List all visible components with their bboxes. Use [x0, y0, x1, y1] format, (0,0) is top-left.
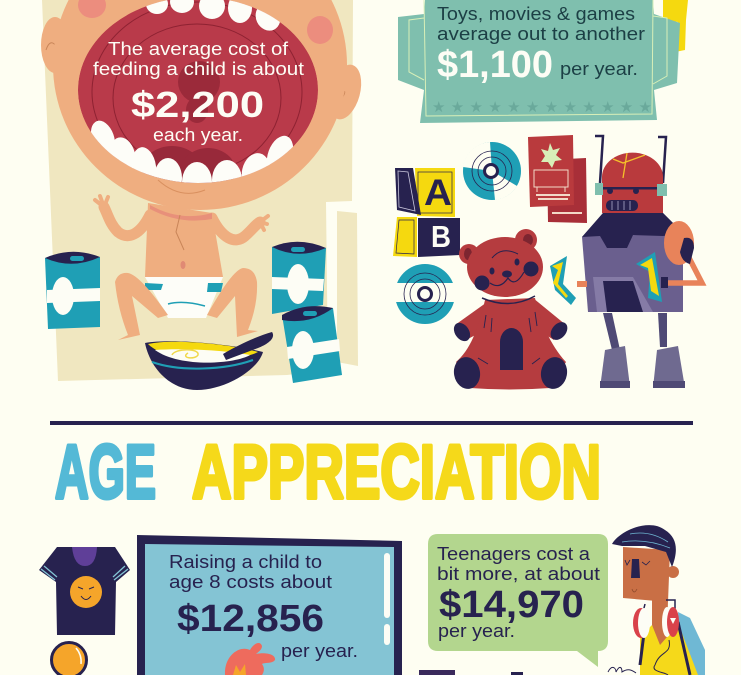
text: feeding cost: $2,200: [131, 84, 264, 125]
icon: CD lower: [395, 264, 455, 324]
icon: t-shirt: [39, 547, 130, 635]
icon: CD upper: [463, 142, 521, 200]
illustration: baby head: [41, 0, 367, 210]
icon: left can: [45, 252, 100, 329]
text: toys cost: $1,100: [437, 44, 553, 86]
icon: cereal bowl: [145, 332, 273, 390]
illustration: robot: [550, 136, 702, 388]
icon: books: [528, 135, 587, 223]
text: age 8 cost: age 8 costs about: [169, 571, 332, 592]
icon: yellow ticket behind: [663, 0, 688, 52]
panel: age 8 screen: [137, 535, 402, 675]
illustration: open mouth: [78, 0, 318, 202]
text: feeding cost: feeding a child is about: [93, 58, 304, 79]
screen surface: [145, 544, 394, 675]
icon: alphabet blocks: B: [431, 219, 451, 254]
text: teen cost: per year.: [438, 620, 515, 641]
heading: age appreciation: [55, 430, 601, 515]
text: toys cost: Toys, movies & games: [437, 3, 635, 24]
text: teen cost: [437, 543, 600, 641]
text: age 8 cost: $12,856: [177, 598, 324, 640]
text: age 8 cost: [169, 551, 358, 661]
beige backdrop: [42, 0, 358, 381]
icon: upper right can: [272, 242, 326, 314]
panel: feeding a child: [41, 0, 367, 390]
scroll bar: [384, 553, 390, 645]
panel: toys ticket: [398, 0, 688, 123]
ticket inner border: [409, 0, 667, 116]
text: feeding cost: each year.: [153, 124, 243, 145]
text: toys cost: [437, 3, 645, 86]
icons: items at bottom edge: [419, 670, 523, 675]
text: feeding cost: [93, 38, 304, 145]
icon: alphabet blocks: [393, 168, 460, 257]
ticket shape: [398, 0, 680, 123]
text: age 8 cost: Raising a child to: [169, 551, 322, 572]
text: teen cost: $14,970: [439, 584, 584, 626]
illustration: teddy bear: [451, 229, 571, 391]
text: toys cost: per year.: [560, 58, 638, 79]
text: feeding cost: The average cost of: [108, 38, 289, 59]
icon: orange badge: [52, 642, 86, 675]
row of stars: ★★★★★★★★★★★★: [432, 99, 652, 116]
screen frame: [137, 535, 402, 675]
icon: scribbled earphone cord: [608, 667, 636, 673]
icon: lower right can: [282, 306, 342, 383]
text: age 8 cost: per year.: [281, 640, 358, 661]
illustration: baby body: [95, 196, 268, 340]
text: teen cost: Teenagers cost a: [437, 543, 591, 564]
icon: alphabet blocks: A: [424, 172, 452, 213]
illustration: teenager: [612, 525, 705, 675]
text: toys cost: average out to another: [437, 23, 645, 44]
text: teen cost: bit more, at about: [437, 563, 600, 584]
icon: heart: [225, 643, 275, 675]
divider rule: [50, 421, 693, 425]
callout: teenagers bubble: [428, 534, 608, 667]
heading: age appreciation: AGE: [55, 430, 156, 515]
